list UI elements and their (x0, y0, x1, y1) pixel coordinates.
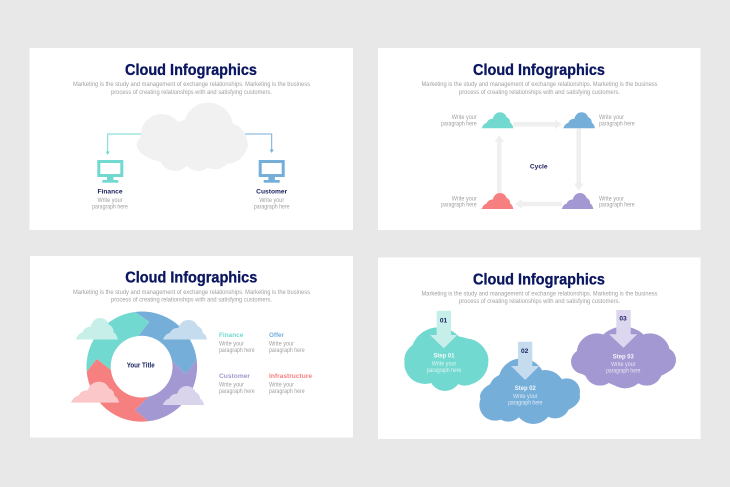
legend: infrastructure: Infrastructure (269, 373, 312, 380)
legend: offer: paragraph here (269, 348, 305, 354)
text: step 2 (508, 385, 543, 407)
text: bottom right (599, 196, 635, 209)
label: finance: paragraph here (92, 204, 128, 210)
subtitle text (73, 81, 310, 96)
arrow: top, pointing right (514, 120, 562, 129)
label: customer: paragraph here (254, 204, 290, 210)
label: finance (92, 188, 128, 210)
title: Cloud Infographics (473, 62, 605, 79)
text: bottom right: paragraph here (599, 203, 635, 209)
subtitle text: process of creating relationships with and satisfying customers. (459, 89, 620, 96)
connector arrow: cloud to finance (106, 134, 142, 155)
icon: large grey cloud (137, 103, 248, 171)
subtitle text (73, 289, 310, 304)
legend: offer: Write your (269, 342, 294, 348)
legend: customer (219, 373, 255, 395)
segment: teal (86, 312, 149, 372)
segment: blue (135, 312, 197, 374)
text: step 3: paragraph here (606, 369, 641, 375)
label: customer (254, 188, 290, 210)
icon: light purple cloud (163, 386, 204, 405)
text: step 3: Write your (611, 362, 636, 368)
subtitle text: Marketing is the study and management of exchange relationships. Marketing is the business (73, 289, 310, 296)
label: customer: Customer (256, 188, 288, 195)
arrow: step 3 (609, 310, 637, 348)
text: bottom left: Write your (452, 196, 477, 202)
title: Cloud Infographics (125, 62, 257, 79)
cloud: step 1 teal (404, 327, 488, 391)
title: Cloud Infographics (473, 271, 605, 288)
subtitle text (422, 290, 658, 305)
arrow: bottom, pointing left (515, 199, 562, 209)
icon: blue monitor (259, 160, 285, 183)
icon: teal monitor (97, 160, 123, 183)
icon: red cloud (482, 193, 513, 209)
cloud: step 2 blue (479, 358, 580, 424)
text: bottom left: paragraph here (441, 203, 477, 209)
chart: ring of arrows (86, 312, 197, 422)
arrow: right, pointing down (574, 128, 584, 191)
text: top right: Write your (599, 115, 624, 121)
icon: light pink cloud (71, 382, 119, 403)
label: cycle: Cycle (530, 164, 548, 170)
text: top left: paragraph here (441, 122, 477, 128)
text: bottom left (441, 196, 477, 209)
icon: light blue cloud (163, 320, 207, 340)
panel: three step clouds (378, 258, 700, 439)
legend: finance: Write your (219, 342, 244, 348)
legend: customer: paragraph here (219, 389, 255, 395)
text: step 1: Write your (432, 361, 456, 367)
text: top right: paragraph here (599, 122, 635, 128)
cloud: step 3 purple (571, 327, 676, 388)
arrow: step 1 (430, 311, 457, 348)
text: step 1: Step 01 (434, 353, 455, 360)
text: step 2: Write your (513, 394, 538, 400)
text: step 2: paragraph here (508, 401, 543, 407)
panel: cloud with two computers (30, 48, 353, 230)
text: bottom right: Write your (599, 196, 624, 202)
subtitle text: process of creating relationships with and satisfying customers. (459, 298, 620, 305)
text: step 3: Step 03 (613, 353, 634, 360)
legend: infrastructure: Write your (269, 382, 294, 388)
legend: finance (219, 332, 255, 354)
subtitle text: Marketing is the study and management of exchange relationships. Marketing is the business (73, 81, 310, 88)
icon: light teal cloud (76, 318, 118, 339)
icon: blue cloud (563, 112, 595, 128)
legend: infrastructure: paragraph here (269, 389, 305, 395)
center label: Your Title (127, 360, 155, 370)
segment: purple (135, 360, 197, 421)
subtitle text: process of creating relationships with and satisfying customers. (111, 89, 272, 96)
connector arrow: cloud to customer (245, 134, 274, 153)
text: top right (599, 115, 635, 128)
legend: finance: Finance (219, 332, 244, 339)
text: top left (441, 115, 477, 128)
text: step 3 (606, 353, 641, 375)
legend: customer: Write your (219, 382, 244, 388)
legend: offer (269, 332, 305, 354)
label: customer: Write your (259, 198, 284, 204)
subtitle text: Marketing is the study and management of exchange relationships. Marketing is the business (422, 81, 658, 88)
legend: finance: paragraph here (219, 348, 255, 354)
legend: infrastructure (269, 373, 312, 395)
label: finance: Write your (98, 198, 122, 204)
arrow: left, pointing up (494, 135, 504, 193)
text: step 1: paragraph here (427, 368, 462, 374)
text: step 2: Step 02 (515, 385, 536, 392)
title: Cloud Infographics (125, 270, 257, 287)
panel: ring diagram (30, 256, 353, 438)
legend: customer: Customer (219, 373, 250, 380)
panel: cycle (378, 48, 700, 230)
segment: red (87, 359, 148, 422)
subtitle text (422, 81, 658, 96)
text: top left: Write your (452, 115, 477, 121)
arrow: step 2 (511, 342, 539, 380)
label: finance: Finance (98, 188, 123, 195)
number 03: 03 (619, 315, 627, 322)
subtitle text: Marketing is the study and management of exchange relationships. Marketing is the business (422, 290, 658, 298)
number 02: 02 (521, 348, 529, 355)
subtitle text: process of creating relationships with and satisfying customers. (111, 296, 272, 304)
number 01: 01 (440, 318, 447, 325)
text: step 1 (427, 353, 462, 374)
icon: teal cloud (482, 112, 513, 128)
icon: purple cloud (562, 193, 593, 209)
legend: offer: Offer (269, 332, 284, 339)
